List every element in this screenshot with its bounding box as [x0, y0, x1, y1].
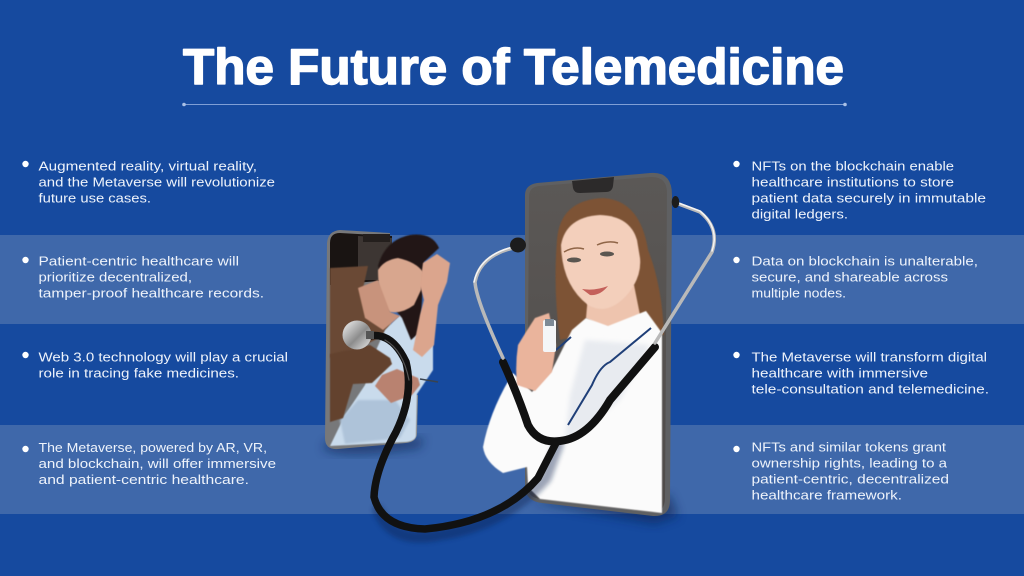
left text block 4: and patient-centric healthcare. [38, 472, 249, 487]
doctor coat [483, 311, 662, 513]
right text block 1 [733, 158, 986, 222]
left text block 2: prioritize decentralized, [38, 270, 192, 284]
doctor mouth [582, 286, 608, 295]
right text block 4: NFTs and similar tokens grant [752, 440, 946, 454]
left text block 4: The Metaverse, powered by AR, VR, [38, 440, 267, 455]
right text block 4: healthcare framework. [752, 488, 902, 502]
right text block 2: secure, and shareable across [752, 270, 948, 284]
patient background [330, 233, 392, 285]
right text block 3: tele-consultation and telemedicine. [752, 382, 989, 396]
title: The Future of Telemedicine [183, 39, 844, 95]
left text block 4: and blockchain, will offer immersive [38, 456, 276, 471]
left text block 3: role in tracing fake medicines. [38, 366, 239, 380]
doctor face [561, 215, 640, 309]
band: row 2 [0, 235, 1024, 324]
right text block 4: patient-centric, decentralized [752, 472, 949, 486]
right text block 3: healthcare with immersive [752, 366, 928, 380]
coat shading [565, 340, 650, 440]
thermometer [420, 379, 438, 382]
stethoscope [342, 196, 714, 537]
right text block 2 [733, 254, 978, 300]
right earpiece [672, 196, 679, 208]
phone body [325, 230, 418, 449]
patient lower hand [375, 369, 420, 403]
phone notch [572, 177, 614, 193]
right text block 4 [733, 440, 949, 502]
phone body [525, 173, 672, 516]
left text block 2: tamper-proof healthcare records. [38, 286, 264, 300]
screen wall [358, 236, 392, 280]
brown robe lower [330, 345, 392, 422]
doctor eyebrows [564, 242, 618, 252]
doctor neck [586, 285, 640, 330]
right text block 1: NFTs on the blockchain enable [752, 158, 954, 174]
left text block 1 [22, 158, 275, 206]
patient hair [378, 235, 439, 340]
vial [543, 319, 556, 352]
shirt [330, 313, 433, 446]
left text block 2: Patient-centric healthcare will [38, 254, 239, 268]
small phone with patient [322, 230, 450, 454]
doctor hair [556, 198, 664, 340]
left earpiece [510, 238, 526, 252]
chest piece [342, 320, 374, 350]
right text block 3 [733, 350, 989, 396]
left text block 3: Web 3.0 technology will play a crucial [38, 350, 288, 364]
doctor hand [516, 313, 556, 391]
patient neck [358, 280, 400, 330]
phone screen [527, 177, 667, 512]
big phone with doctor [483, 173, 678, 524]
left text block 2 [22, 254, 264, 300]
left text block 1: future use cases. [38, 190, 151, 206]
Y tube [503, 347, 655, 441]
left text block 1: Augmented reality, virtual reality, [38, 158, 257, 174]
notch [363, 234, 390, 242]
brown robe upper [330, 266, 392, 358]
patient raised hand and arm [413, 254, 450, 357]
main tube [370, 336, 556, 529]
doctor eyes [567, 252, 614, 262]
right text block 2: Data on blockchain is unalterable, [752, 254, 978, 268]
right text block 1: healthcare institutions to store [752, 174, 954, 190]
left metal tube [475, 248, 513, 358]
tube highlight [385, 340, 409, 380]
title divider [182, 103, 847, 106]
right text block 3: The Metaverse will transform digital [752, 350, 987, 364]
patient face [378, 258, 423, 312]
shirt folds [340, 400, 410, 444]
tube shadow [378, 445, 558, 537]
right metal tube [655, 203, 714, 343]
band: row 4 [0, 425, 1024, 514]
right text block 2: multiple nodes. [752, 286, 846, 300]
left text block 1: and the Metaverse will revolutionize [38, 174, 275, 190]
right text block 1: patient data securely in immutable [752, 190, 986, 206]
right text block 4: ownership rights, leading to a [752, 456, 948, 470]
doctor own stethoscope [556, 328, 651, 425]
right text block 1: digital ledgers. [752, 206, 848, 222]
left text block 4 [22, 440, 276, 487]
left text block 3 [22, 350, 288, 380]
